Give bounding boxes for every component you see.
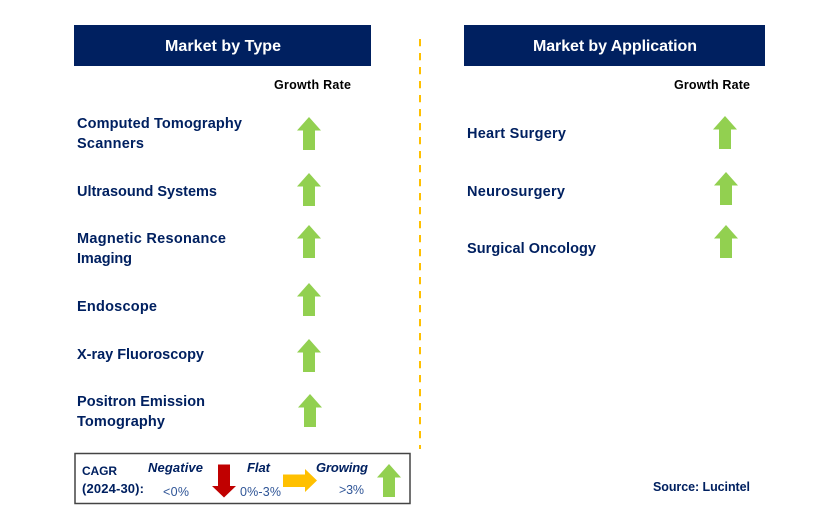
source note: Source: Lucintel [653,480,750,494]
row: magnetic resonance imaging: Imaging [77,251,132,267]
row: surgical oncology [467,225,738,258]
legend: cagr [75,454,410,504]
row: endoscope: Endoscope [77,299,157,315]
row: magnetic resonance imaging [77,225,321,267]
legend: flat: 0%-3% [240,485,281,499]
row: ultrasound systems [77,173,321,206]
row: neurosurgery: Neurosurgery [467,184,565,200]
legend: growing: >3% [339,483,364,497]
legend: flat [240,460,317,499]
legend: growing [316,460,401,497]
row: computed tomography scanners: Computed Tomography [77,116,242,132]
row: magnetic resonance imaging: Magnetic Resonance [77,231,226,247]
row: computed tomography scanners [77,116,321,152]
row: surgical oncology: Surgical Oncology [467,241,596,257]
heading: market by type [74,25,371,66]
column label: growth rate: Growth Rate [274,78,351,92]
column label: growth rate: Growth Rate [674,78,750,92]
row: positron emission tomography: Tomography [77,414,165,430]
legend: negative: <0% [163,485,189,499]
row: neurosurgery [467,172,738,205]
legend label [82,464,144,496]
legend: negative [148,460,236,499]
legend: negative: Negative [148,460,203,475]
row: positron emission tomography: Positron Emission [77,394,205,410]
row: heart surgery: Heart Surgery [467,126,566,142]
legend: growing: Growing [316,460,368,475]
row: heart surgery [467,116,737,149]
row: endoscope [77,283,321,316]
heading: market by application: Market by Application [533,38,697,55]
row: x-ray fluoroscopy: X-ray Fluoroscopy [77,347,204,363]
legend label: CAGR [82,464,117,478]
row: positron emission tomography [77,394,322,430]
row: computed tomography scanners: Scanners [77,136,144,152]
legend: flat: Flat [247,460,271,475]
heading: market by application [464,25,765,66]
panel: market by type [74,25,371,430]
row: ultrasound systems: Ultrasound Systems [77,184,217,200]
heading: market by type: Market by Type [165,38,281,55]
legend label: (2024-30): [82,481,144,496]
panel: market by application [464,25,765,258]
row: x-ray fluoroscopy [77,339,321,372]
